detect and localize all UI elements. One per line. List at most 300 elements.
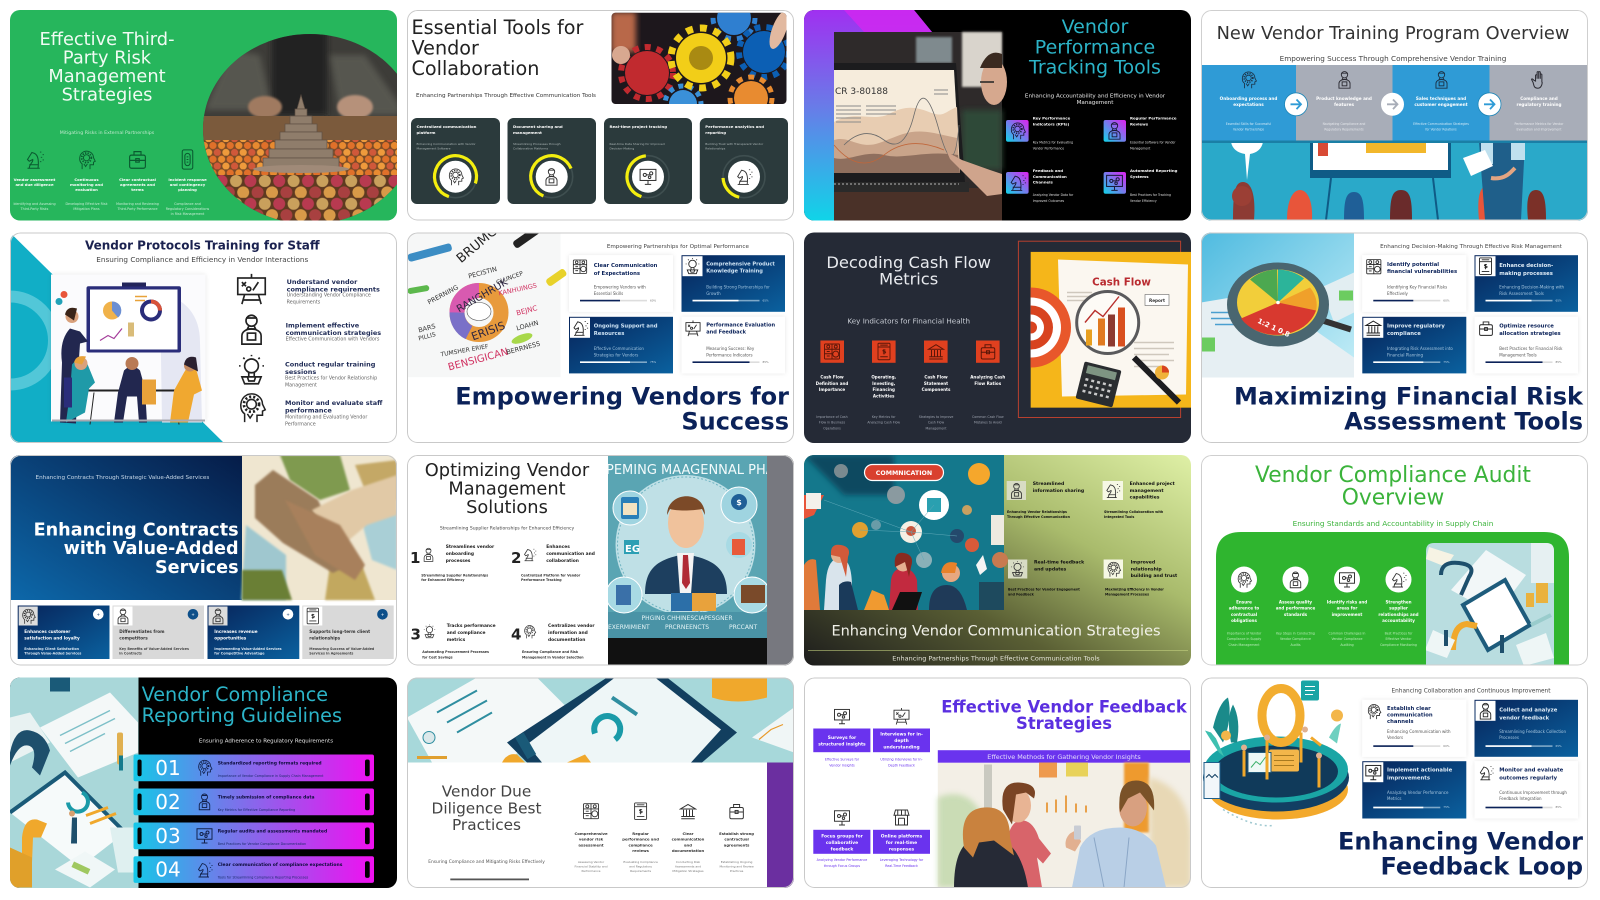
icon 2	[894, 708, 909, 724]
title: Solutions	[466, 497, 548, 518]
item 1: Key Metrics for Evaluating	[1033, 140, 1073, 144]
card: Establish clear: Enhancing Communication with	[1387, 729, 1451, 734]
icon: board	[238, 274, 265, 304]
icon: briefcase	[130, 152, 145, 168]
icon: bulb	[239, 355, 264, 384]
desc 3: Assessments and	[675, 864, 701, 868]
image: manager illustration: $	[736, 498, 742, 507]
title: Vendor Compliance	[142, 683, 328, 706]
box 4: Online platforms	[881, 834, 923, 840]
title: Effective Third-	[39, 29, 175, 50]
desc 2: Regulatory Requirements	[1324, 128, 1364, 132]
desc 4: Effective Vendor	[1385, 637, 1412, 641]
item 2: management	[1130, 488, 1164, 494]
band: Effective Methods for Gathering Vendor Insights	[987, 753, 1141, 761]
image: word-map sketch: TUMSHER ERIEF	[439, 343, 490, 359]
arrow 2	[1381, 93, 1404, 116]
card: Implement actionable: Implement actionable	[1387, 768, 1453, 774]
bar 03	[134, 822, 374, 849]
bar 03: Regular audits and assessments mandated	[218, 828, 327, 834]
desc 4: Leveraging Technology for	[880, 858, 924, 862]
card: Identify potential: Identify potential	[1387, 262, 1439, 268]
card 4: Building Trust with Transparent Vendor	[705, 142, 764, 146]
label 3: Statement	[924, 381, 948, 386]
item 1: information sharing	[1033, 488, 1084, 494]
card 2: Document sharing and	[513, 124, 563, 129]
label 3: Cash Flow	[924, 374, 948, 380]
label 1: contractual	[1231, 612, 1258, 617]
card 1: Enhancing Client Satisfaction	[24, 647, 80, 651]
item 4: Best Practices for Tracking	[1130, 193, 1171, 197]
icon 1	[584, 804, 598, 819]
label 2: Operating,	[871, 374, 897, 380]
image: word-map sketch: BARS	[417, 322, 436, 334]
desc 4: Mistakes to Avoid	[974, 421, 1002, 425]
card: Establish clear: communication	[1387, 713, 1433, 719]
card 1: satisfaction and loyalty	[24, 636, 80, 640]
item 3	[1033, 168, 1074, 203]
card: Improve regulatory: 75%	[1443, 360, 1450, 364]
item 1: onboarding	[446, 551, 474, 557]
panel: Vendor Compliance Audit Overview	[1201, 455, 1588, 666]
label 4: Compliance and	[1520, 96, 1558, 101]
item 2: Performance Tracking	[521, 578, 562, 582]
card: Implement actionable: Analyzing Vendor Performance	[1387, 790, 1449, 795]
label 2: evaluation	[75, 187, 98, 192]
item 1: processes	[446, 558, 471, 564]
card: Comprehensive Product: Growth	[706, 291, 721, 296]
card: Ongoing Support: 75%	[650, 360, 657, 364]
item 2: Enhanced project	[1130, 481, 1175, 487]
card 3: for Competitive Advantage	[214, 652, 265, 656]
label 2: Product knowledge and	[1316, 96, 1372, 101]
desc 2: Navigating Compliance and	[1323, 122, 1365, 126]
scene: classroom	[1201, 142, 1588, 220]
desc 3: Mitigation Strategies	[672, 869, 704, 873]
item 3: Real-time feedback	[1034, 560, 1085, 566]
icon 4	[730, 804, 743, 819]
icon 3	[1436, 72, 1447, 88]
desc 3: Cash Flow	[928, 421, 944, 425]
bar 04: 04	[155, 858, 181, 882]
item 4: Vendor Efficiency	[1130, 199, 1157, 203]
image: manager illustration: EG	[625, 544, 640, 555]
title: Effective Vendor Feedback	[941, 698, 1188, 716]
label 2: Continuous	[74, 177, 99, 182]
panel: Empowering Vendors for Success	[407, 214, 794, 443]
card: Enhance decision-making: Enhancing Decision-Making with	[1499, 284, 1565, 290]
card: Performance Evaluation: Performance Evaluation	[706, 322, 775, 328]
title: Management	[448, 478, 566, 500]
item 4: Maximizing Efficiency in Vendor	[1105, 588, 1164, 592]
title: Enhancing Contracts	[34, 520, 239, 540]
label 2: Activities	[873, 393, 895, 398]
desc 3: Conducting Risk	[676, 860, 700, 864]
icon circle 1	[1231, 566, 1257, 592]
item 3: for Cost Savings	[422, 656, 453, 660]
bar 02: 02	[155, 790, 181, 814]
arrow 1	[1284, 93, 1308, 116]
card: Establish clear	[1362, 700, 1466, 757]
item 3: Feedback and	[1033, 168, 1063, 173]
subtitle: Empowering Partnerships for Optimal Performance	[607, 244, 750, 250]
image: watercolor discussion	[938, 762, 1191, 888]
label 4: planning	[178, 187, 197, 192]
subtitle: Ensuring Standards and Accountability in Supply Chain	[1293, 519, 1493, 528]
label 1: adherence to	[1229, 606, 1259, 611]
photo: gears	[612, 12, 786, 104]
label 3: improvement	[1332, 612, 1362, 617]
desc 4: Practices	[730, 869, 744, 873]
card 4: Measuring Success of Value-Added	[309, 647, 375, 651]
item 2: collaboration	[546, 558, 579, 564]
label 4: relationships and	[1378, 612, 1419, 617]
item 2	[1130, 116, 1177, 150]
label 4: Flow Ratios	[974, 381, 1002, 386]
card: Enhance decision-making: making processes	[1499, 271, 1553, 277]
item 1: Streamlines vendor	[446, 544, 495, 550]
title: Practices	[452, 816, 521, 834]
label 4: Incident response	[168, 177, 207, 182]
panel: Optimizing Vendor Management Solutions	[407, 455, 794, 666]
card: Improve regulatory: compliance	[1387, 331, 1421, 337]
desc 1: Financial Stability and	[575, 864, 608, 868]
card: Collect and analyze: Streamlining Feedback Collection	[1499, 729, 1566, 734]
item 3: Improved Outcomes	[1033, 199, 1064, 203]
label 4: Strengthen	[1385, 600, 1412, 604]
card 2: Streamlining Processes through	[513, 142, 561, 146]
badge: COMMNICATION	[864, 464, 944, 480]
label 1: Cash Flow	[820, 374, 844, 380]
card: Optimize resource: Optimize resource	[1499, 323, 1554, 329]
side strip	[767, 455, 794, 666]
image: word-map sketch: PRERNING	[426, 283, 460, 306]
card: Performance Evaluation	[682, 317, 785, 373]
desc 3: Vendor Compliance	[1332, 637, 1363, 641]
image: word-map sketch: ERISIS	[470, 319, 507, 343]
card: Ongoing Support: Ongoing Support and	[594, 323, 658, 329]
card 3: Real-time project tracking	[610, 124, 667, 129]
label 1: Definition and	[816, 381, 848, 386]
image: cash flow magnifier	[991, 252, 1192, 408]
item 1: Key Performance	[1033, 116, 1071, 120]
desc 4: Establishing Ongoing	[721, 860, 753, 864]
photo: pyramid and beads	[200, 30, 400, 230]
box 3	[813, 830, 870, 854]
icon 2	[635, 803, 647, 819]
panel: Enhancing Vendor Feedback Loop	[1201, 678, 1588, 888]
desc 3: Management	[926, 426, 947, 430]
item 2	[1103, 481, 1175, 519]
card: Ongoing Support	[569, 317, 673, 373]
desc 1: Vendor Partnerships	[1233, 128, 1264, 132]
card: Comprehensive Product	[682, 255, 785, 312]
item 4	[285, 399, 383, 427]
desc 4: Performance Metrics for Vendor	[1515, 122, 1564, 126]
box 1: Surveys for	[828, 735, 857, 741]
card 1: platform	[416, 130, 435, 135]
card 3: Decision-Making	[610, 146, 634, 150]
card 4: +	[381, 612, 384, 617]
image: word-map sketch	[407, 214, 568, 377]
card: Improve regulatory: Financial Planning	[1387, 352, 1423, 357]
item 4: Systems	[1130, 174, 1149, 179]
icon 3	[834, 811, 850, 825]
title: Collaboration	[412, 57, 539, 80]
card: Monitor and evaluate	[1474, 761, 1578, 818]
label 2: features	[1334, 102, 1354, 107]
image: word-map sketch: LOAHN	[515, 319, 539, 332]
item 1: Indicators (KPIs)	[1033, 121, 1069, 126]
card: Collect and analyze: 65%	[1556, 744, 1562, 748]
woman listening	[1004, 820, 1051, 888]
table	[88, 390, 180, 392]
desc 1: Importance of Cash	[816, 415, 848, 419]
card: Implement actionable: 75%	[1443, 805, 1450, 809]
box 3: feedback	[831, 846, 853, 852]
gradient accent	[804, 10, 932, 220]
item 2: Management	[1130, 146, 1151, 150]
card: Establish clear: Vendors	[1387, 735, 1403, 740]
label 2: performance and	[622, 837, 659, 842]
panel: Effective Vendor Feedback Strategies	[804, 678, 1191, 888]
desc 3: Effective Communication Strategies	[1413, 122, 1469, 126]
photo: laptop with chart	[834, 32, 1007, 220]
desc 2: Audits	[1290, 643, 1301, 647]
desc 1: Chain Management	[1228, 643, 1260, 647]
photo: laptop with chart: CR 3-80188	[835, 87, 888, 97]
feature columns	[13, 150, 210, 216]
card: Enhance decision-making: 65%	[1556, 298, 1562, 302]
card: Identify potential: 60%	[1443, 298, 1450, 302]
label 4: contractual	[724, 837, 749, 842]
item 2: Integrated Tools	[1104, 515, 1134, 519]
card: Optimize resource	[1474, 317, 1578, 373]
card: Clear Communication: of Expectations	[594, 271, 640, 277]
card: Implement actionable: improvements	[1387, 776, 1430, 782]
item 2: capabilities	[1130, 494, 1160, 500]
desc 1: Assessing Vendor	[578, 860, 605, 864]
title: Strategies	[62, 84, 152, 106]
image: manager illustration: PRCCANT	[729, 624, 757, 631]
item 4: documentation	[548, 637, 585, 643]
panel: Vendor Compliance Reporting Guidelines	[10, 678, 397, 888]
label 1: Comprehensive	[574, 831, 608, 836]
image: word-map sketch: BEJNC	[515, 304, 538, 317]
card 2: +	[191, 612, 195, 617]
subtitle: Enhancing Partnerships Through Effective Communication Tools	[416, 93, 596, 99]
band	[1201, 65, 1588, 143]
card 2: in Contracts	[119, 652, 142, 656]
item 2: Regular Performance	[1130, 116, 1177, 120]
card: Identify potential: Identifying Key Financial Risks	[1387, 284, 1447, 290]
card: Clear Communication: Essential Skills	[594, 291, 623, 296]
box 1	[813, 728, 870, 752]
card: Monitor and evaluate: Feedback Integration	[1499, 796, 1542, 801]
title: Vendor Due	[442, 782, 531, 800]
heading: Feedback Loop	[1380, 852, 1583, 880]
desc 1: Vendor Insights	[829, 764, 855, 768]
subtitle: Ensuring Compliance and Efficiency in Vendor Interactions	[96, 255, 309, 264]
title: Tracking Tools	[1028, 56, 1161, 78]
item 3: Conduct regular training	[285, 360, 376, 368]
card: Implement actionable: Metrics	[1387, 796, 1402, 801]
label 4: Analyzing Cash	[970, 374, 1005, 380]
item 3: Communication	[1033, 174, 1067, 179]
item 4	[511, 623, 595, 660]
item 2	[286, 322, 381, 342]
item 1	[410, 544, 495, 582]
card: Performance Evaluation: 85%	[762, 360, 769, 364]
panel: Enhancing Vendor Communication Strategies	[804, 455, 1191, 666]
item 2: communication strategies	[286, 329, 381, 337]
card: Enhance decision-making: Enhance decision-	[1499, 263, 1553, 269]
desc 2: Depth Feedback	[888, 764, 915, 768]
desc 3: Analyzing Vendor Performance	[817, 858, 867, 862]
card: Monitor and evaluate: outcomes regularly	[1499, 776, 1558, 782]
desc 2: and Regulatory	[629, 864, 652, 868]
seated people	[66, 359, 95, 422]
label 1: Ensure	[1236, 600, 1252, 604]
card 2: Collaborative Platforms	[513, 146, 548, 150]
item 1: Understand vendor	[287, 278, 358, 286]
item 2: Essential Software for Vendor	[1130, 140, 1176, 144]
title: Essential Tools for	[412, 16, 583, 39]
item 1: Understanding Vendor Compliance	[287, 292, 371, 298]
label 4: agreements	[724, 842, 750, 847]
card: Optimize resource: allocation strategies	[1499, 331, 1561, 337]
card 2	[112, 606, 204, 659]
item 2: Reviews	[1130, 121, 1149, 126]
desc 4: Common Cash Flow	[972, 415, 1004, 419]
desc 4: Evaluation and Improvement	[1517, 128, 1562, 132]
card: Collect and analyze: Collect and analyze	[1499, 707, 1558, 713]
icon tile 3	[1006, 172, 1029, 194]
item 4: Monitor and evaluate staff	[285, 399, 383, 407]
title: Vendor	[412, 36, 479, 60]
item 3	[285, 360, 377, 388]
card 2: competitors	[119, 636, 148, 640]
subtitle: Enhancing Contracts Through Strategic Value-Added Services	[36, 475, 209, 481]
label 4: accountability	[1382, 618, 1415, 623]
item 3: Analyzing Vendor Data for	[1033, 193, 1074, 197]
icon tile 1	[1006, 120, 1029, 142]
bar 01: Standardized reporting formats required	[218, 760, 322, 766]
card 3: Real-time Data Sharing for Improved	[610, 142, 665, 146]
panel: Essential Tools for Vendor Collaboration	[407, 0, 794, 220]
bar 03: 03	[155, 824, 181, 848]
image: word-map sketch: KANHUINGS	[498, 282, 538, 297]
green panel	[1216, 532, 1569, 666]
arrow 3	[1478, 93, 1501, 116]
image: team communication network	[804, 455, 1008, 610]
item 2	[511, 544, 595, 582]
subtitle: Empowering Success Through Comprehensive Vendor Training	[1280, 54, 1506, 63]
title: Diligence Best	[432, 800, 541, 818]
image: handshake over map	[241, 455, 397, 600]
panel: New Vendor Training Program Overview	[1201, 10, 1588, 220]
bar 02	[134, 788, 374, 815]
card 2	[508, 118, 596, 205]
item 4: information and	[548, 630, 588, 636]
title: New Vendor Training Program Overview	[1217, 23, 1569, 44]
image: risk gauge magnifier: 1:2 1 0.8	[1256, 317, 1291, 339]
item 4: Ensuring Compliance and Risk	[522, 650, 579, 654]
label 1: Importance	[819, 387, 845, 392]
card 3	[604, 118, 692, 204]
icon 1	[834, 709, 850, 724]
desc 3: Monitoring and Reviewing	[116, 202, 159, 206]
desc 2: Evaluating Compliance	[623, 860, 658, 864]
blue hero	[10, 455, 242, 600]
card: Ongoing Support: Resources	[594, 331, 624, 337]
card: Enhance decision-making: Risk Assessment Tools	[1499, 291, 1544, 296]
subtitle: Enhancing Collaboration and Continuous Improvement	[1391, 688, 1551, 694]
card: Improve regulatory: Improve regulatory	[1387, 323, 1445, 329]
icon tile 3	[924, 340, 948, 363]
title: Vendor Protocols Training for Staff	[85, 238, 320, 252]
label 1: vendor risk	[579, 837, 604, 842]
card: Implement actionable	[1362, 761, 1466, 818]
item 4: Management in Vendor Selection	[522, 656, 584, 660]
desc 2: Mitigation Plans	[73, 207, 100, 211]
desc 2: Key Steps in Conducting	[1276, 632, 1315, 636]
label 4: Establish strong	[719, 831, 754, 836]
band	[938, 750, 1191, 763]
desc 4: Monitoring and Review	[719, 864, 754, 868]
card: Collect and analyze: Processes	[1499, 735, 1519, 740]
icon: engineer	[242, 315, 261, 344]
image: manager illustration	[606, 455, 783, 666]
card: Identify potential	[1362, 255, 1466, 312]
title: with Value-Added	[64, 539, 239, 559]
card 3: Increases revenue	[214, 629, 258, 634]
card: Comprehensive Product: Comprehensive Product	[706, 262, 775, 268]
label 3: documentation	[672, 848, 704, 853]
item 3: Best Practices for Vendor Engagement	[1008, 588, 1080, 592]
label 2: compliance	[628, 842, 653, 847]
label 1: Vendor assessment	[14, 177, 56, 182]
icon tile 2	[1104, 120, 1126, 142]
subtitle: Enhancing Decision-Making Through Effective Risk Management	[1380, 244, 1563, 250]
box 4: responses	[889, 846, 915, 852]
heading: Maximizing Financial Risk	[1234, 382, 1584, 410]
label 3: Components	[922, 387, 951, 392]
item 2: communication and	[546, 551, 595, 557]
subtitle: Streamlining Supplier Relationships for Enhanced Efficiency	[440, 526, 575, 532]
item 1: Enhancing Vendor Relationships	[1007, 510, 1067, 514]
desc 1: Third-Party Risks	[20, 207, 49, 211]
desc 4: Compliance Monitoring	[1380, 643, 1417, 647]
label 1: and due diligence	[15, 182, 54, 187]
item 1	[1033, 116, 1073, 150]
card: Establish clear: 60%	[1443, 744, 1450, 748]
icon tile 4	[976, 340, 1000, 363]
item 1: Requirements	[287, 300, 321, 306]
card: Comprehensive Product: Building Strong Partnerships for	[706, 284, 770, 290]
card 4: Supports long-term client	[309, 629, 370, 634]
image: word-map sketch: BRUMG	[454, 224, 501, 267]
box 3: collaborative	[826, 840, 858, 846]
card: Performance Evaluation: and Feedback	[706, 329, 747, 335]
title: Optimizing Vendor	[425, 460, 590, 481]
card 1	[411, 118, 500, 204]
desc 4: Compliance and	[174, 202, 201, 206]
card: Ongoing Support: Strategies for Vendors	[594, 352, 638, 357]
title: Vendor Compliance Audit	[1255, 463, 1531, 488]
subtitle: Enhancing Partnerships Through Effective Communication Tools	[892, 654, 1100, 662]
title: Management	[48, 66, 166, 87]
